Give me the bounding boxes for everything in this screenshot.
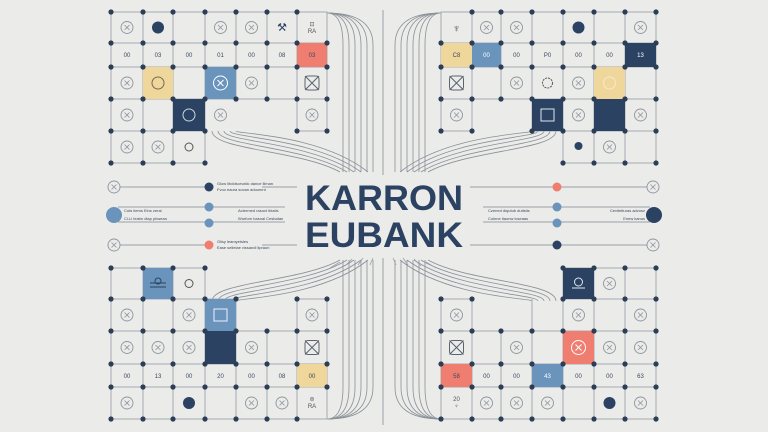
panel: right legend rows	[470, 181, 662, 251]
title	[305, 179, 463, 255]
panel: bottom-left grid	[108, 265, 330, 422]
coloured cells	[143, 268, 173, 299]
panel: left legend rows: Glow libddsorvatic dance lliman	[217, 181, 273, 186]
panel: bottom-right grid	[438, 265, 659, 422]
panel: left legend rows: Actermed rasuct ibiatis	[238, 208, 278, 213]
panel: left legend rows: Wurforn basnal Cesbatan	[238, 216, 283, 221]
panel: bottom-left grid: 13	[155, 374, 162, 380]
panel: top-left grid: 03	[309, 53, 316, 59]
panel: top-left grid: ⊡	[309, 22, 315, 28]
panel: left legend rows: Fvoo eaura socan aduomnt	[217, 187, 267, 192]
panel: top-right grid: 00	[606, 53, 613, 59]
radiating dashes under title	[330, 258, 436, 268]
panel: top-right grid	[438, 9, 659, 166]
panel: bottom-left grid: 00	[248, 374, 255, 380]
panel: bottom-left grid: ⊜	[309, 397, 315, 403]
panel: bottom-right grid: 00	[575, 374, 582, 380]
curves: top-right bundle	[395, 13, 556, 172]
panel: right legend rows: Coinne tiaonw icseaas	[488, 216, 528, 221]
icons	[572, 278, 585, 288]
curves: bottom-left bundle	[212, 260, 373, 419]
panel: bottom-left grid: 00	[124, 374, 131, 380]
panel: bottom-left grid: 00	[309, 374, 316, 380]
panel: bottom-left grid: 08	[279, 374, 286, 380]
panel: bottom-right grid: 43	[544, 374, 551, 380]
title: EUBANK	[305, 216, 463, 255]
panel: bottom-right grid: 63	[637, 374, 644, 380]
curves: top-left bundle	[212, 13, 373, 172]
coloured cells	[563, 268, 594, 299]
curves: bottom-right bundle	[395, 260, 556, 419]
panel: left legend rows	[106, 181, 297, 251]
panel: left legend rows: Ease selieiae vissandl lipraon	[217, 245, 269, 250]
icons	[121, 22, 133, 34]
panel: top-left grid: 00	[248, 53, 255, 59]
panel: top-right grid: C8	[453, 53, 461, 59]
panel: top-left grid: RA	[308, 29, 316, 35]
panel: bottom-right grid: 20	[453, 397, 460, 403]
panel: left legend rows: Ci-Li leabn diap phwean	[124, 216, 167, 221]
panel: right legend rows: Enew kanus	[623, 216, 645, 221]
panel: top-right grid: 00	[483, 53, 490, 59]
panel: right legend rows: Czened diqutub dutistis	[488, 208, 530, 213]
panel: top-left grid: 00	[186, 53, 193, 59]
icons: ♆	[452, 23, 461, 35]
panel: top-right grid: P0	[544, 53, 552, 59]
panel: right legend rows: Cevitetturas advosz	[610, 208, 645, 213]
center vertical lines	[382, 10, 384, 425]
panel: top-left grid: ⚒	[277, 22, 287, 34]
title: KARRON	[305, 179, 463, 218]
icons	[150, 278, 166, 287]
panel: top-left grid	[108, 9, 330, 166]
panel: left legend rows: Cuts items Eins zeral	[124, 208, 162, 213]
panel: bottom-right grid: 00	[483, 374, 490, 380]
panel: top-right grid: 00	[513, 53, 520, 59]
panel: bottom-left grid: 00	[186, 374, 193, 380]
panel: top-left grid: 08	[279, 53, 286, 59]
panel: bottom-left grid: RA	[308, 404, 316, 410]
panel: bottom-right grid: 58	[453, 374, 460, 380]
coloured cells	[297, 43, 327, 67]
panel: left legend rows: Glisy leamyetsles	[217, 239, 248, 244]
panel: bottom-right grid: 00	[513, 374, 520, 380]
panel: top-left grid: 01	[217, 53, 224, 59]
panel: bottom-right grid: 00	[606, 374, 613, 380]
panel: bottom-left grid: 20	[217, 374, 224, 380]
panel: top-right grid: 00	[575, 53, 582, 59]
panel: top-left grid: 03	[155, 53, 162, 59]
panel: top-right grid: 13	[637, 53, 644, 59]
panel: bottom-right grid: ♆	[454, 404, 459, 410]
panel: top-left grid: 00	[124, 53, 131, 59]
coloured cells	[441, 43, 472, 67]
